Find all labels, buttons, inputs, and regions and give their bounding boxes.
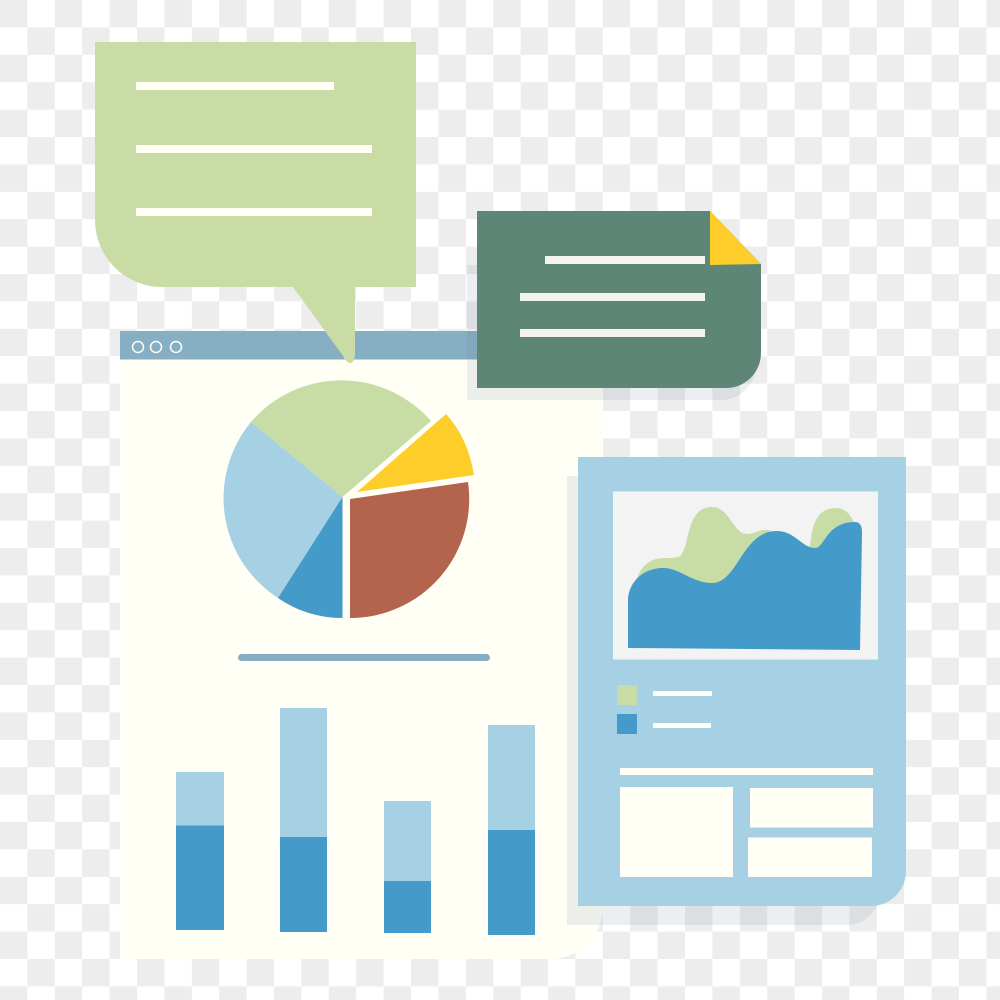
panel: green note <box>477 211 761 388</box>
content boxes <box>620 787 873 877</box>
panel: speech bubble <box>95 42 416 363</box>
legend <box>617 685 712 734</box>
panel: blue report card <box>578 457 906 906</box>
panel: browser document <box>120 331 603 959</box>
window control dots <box>132 342 182 352</box>
chart divider line <box>238 654 490 661</box>
document body <box>120 359 603 959</box>
shadow: green note <box>467 265 756 400</box>
shadow: blue panel <box>567 476 881 925</box>
heading line <box>620 768 873 775</box>
note text lines <box>520 256 705 337</box>
bar chart <box>176 708 535 935</box>
icon: folded corner <box>710 211 761 265</box>
browser title bar <box>120 331 603 360</box>
pie chart <box>224 380 474 618</box>
bubble text lines <box>136 82 372 216</box>
area chart frame <box>613 492 878 660</box>
area chart <box>628 507 862 650</box>
